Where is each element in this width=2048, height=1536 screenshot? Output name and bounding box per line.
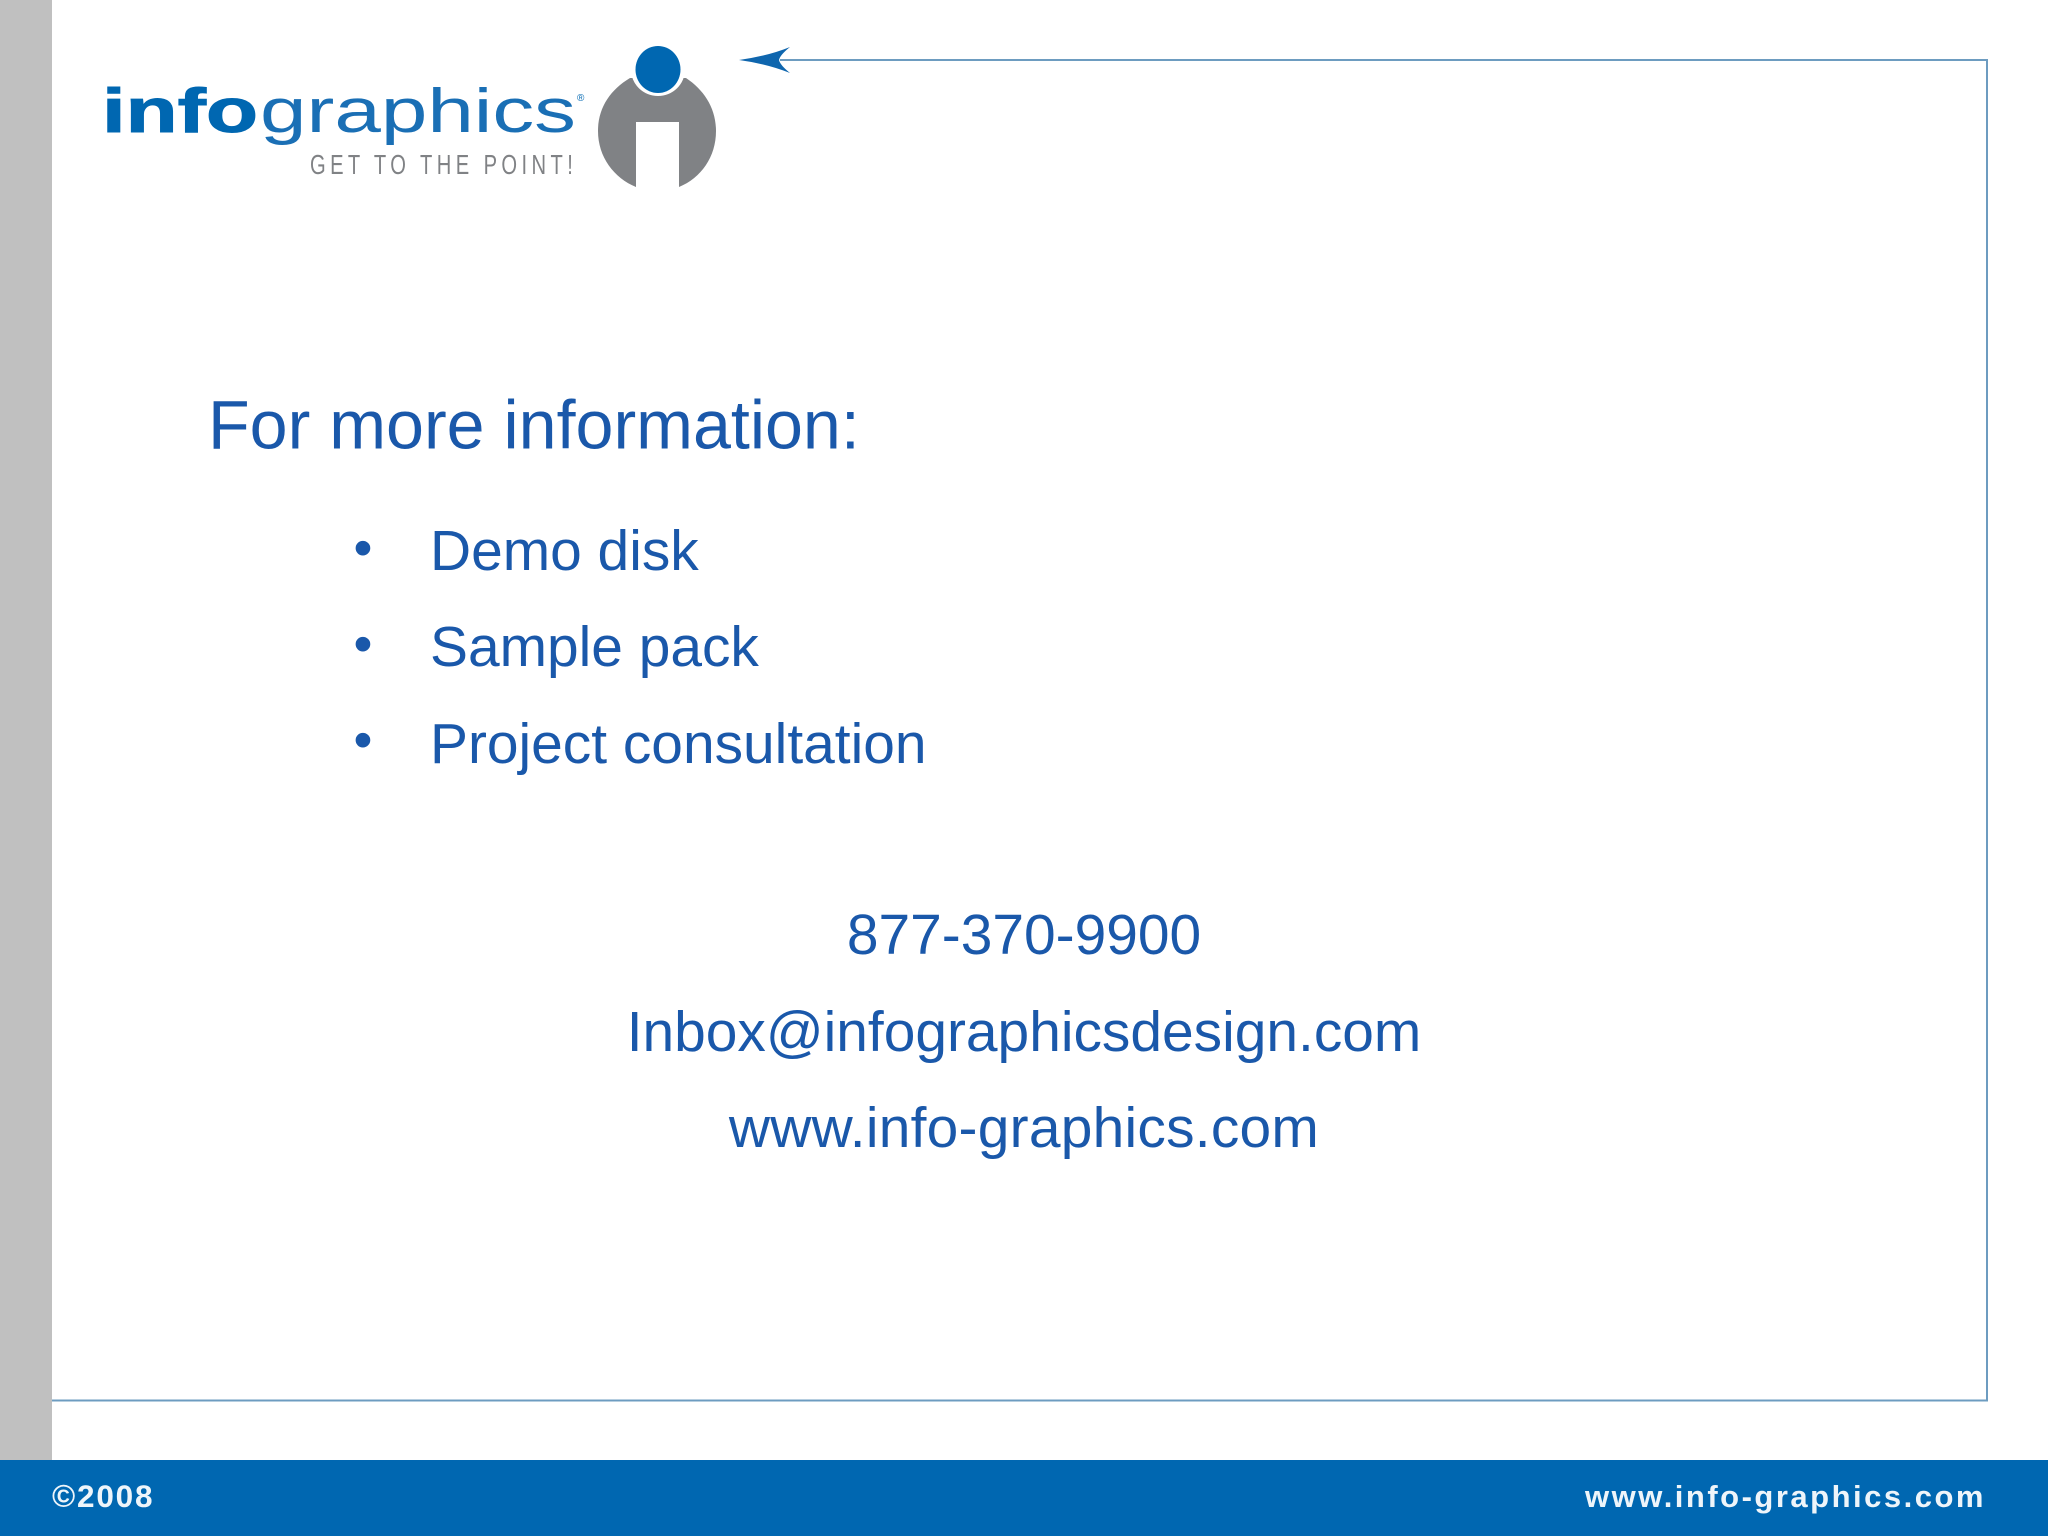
bullet list [354, 518, 926, 776]
footer url: www.info-graphics.com [1584, 1479, 1986, 1514]
bullet 1: • [354, 518, 372, 578]
item 3: Project consultation [430, 712, 926, 776]
icon head ring [631, 43, 685, 96]
arrow head [739, 47, 790, 73]
logo [102, 43, 716, 187]
bullet 3: • [354, 710, 372, 770]
grey sidebar [0, 0, 52, 1460]
logo tagline: GET TO THE POINT! [310, 150, 573, 181]
icon body [598, 78, 716, 187]
item 1: Demo disk [430, 519, 699, 583]
footer bar [0, 1460, 2048, 1536]
copyright: ©2008 [52, 1478, 154, 1514]
logo wordmark bold: info [102, 77, 258, 146]
item 2: Sample pack [430, 615, 759, 679]
logo wordmark light: graphics [260, 77, 576, 146]
heading: For more information: [208, 388, 860, 464]
logo icon [598, 43, 716, 187]
email: Inbox@infographicsdesign.com [627, 1000, 1421, 1064]
bullet 2: • [354, 614, 372, 674]
icon head [636, 46, 680, 93]
registered mark: ® [577, 93, 585, 104]
contact details [627, 903, 1421, 1160]
phone: 877-370-9900 [847, 903, 1201, 967]
website: www.info-graphics.com [728, 1096, 1319, 1160]
